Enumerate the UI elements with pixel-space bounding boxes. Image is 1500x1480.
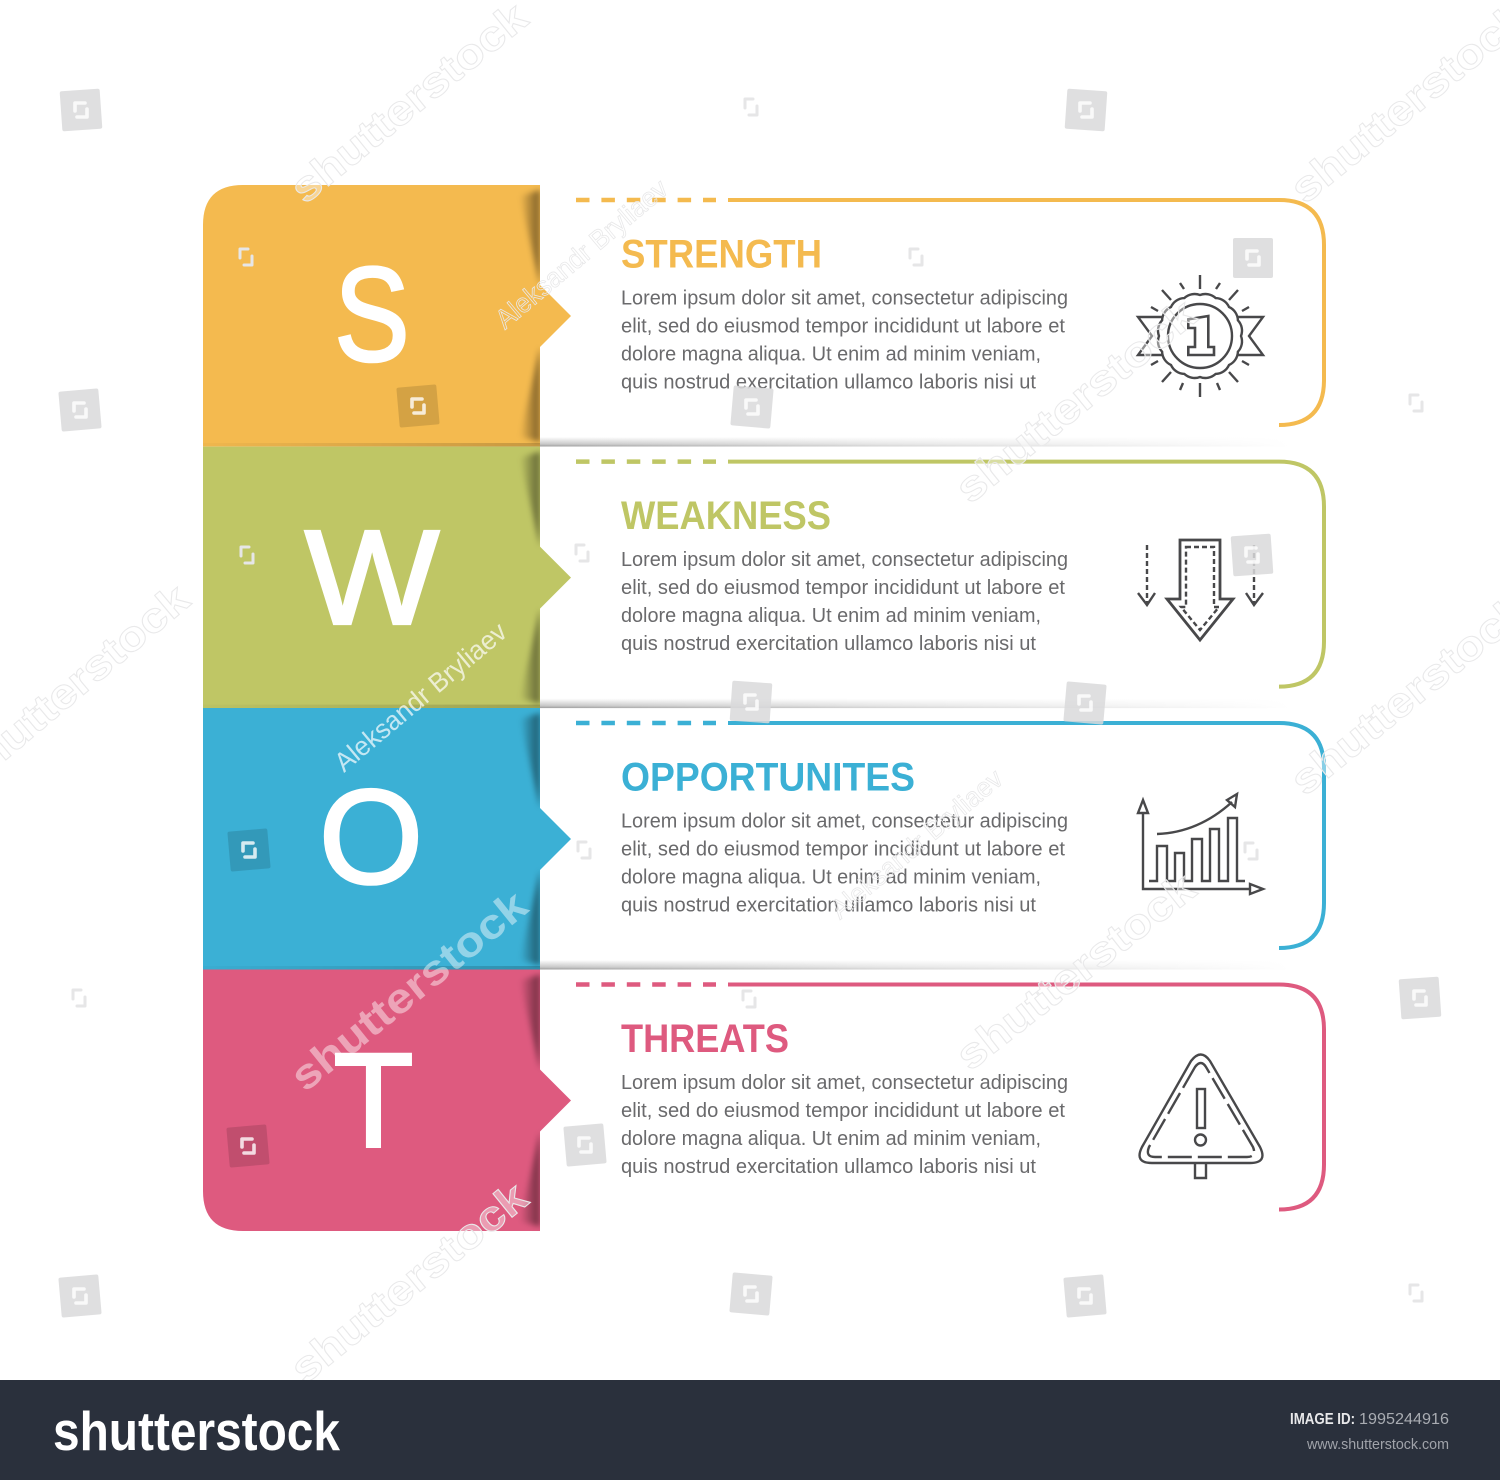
outline: weakness dashes: [576, 459, 716, 464]
icon: down arrows: [1138, 540, 1263, 640]
watermark: diagonal text: shutterstock: [946, 289, 1206, 512]
footer image id number: 1995244916: [1359, 1411, 1449, 1428]
heading: strength: STRENGTH: [621, 232, 822, 276]
text block: opportunities: [621, 810, 1068, 916]
watermark: diagonal text: shutterstock: [281, 1173, 537, 1392]
fold shadow: O block: [203, 713, 540, 970]
row: strength: [203, 185, 1324, 447]
fold shadow: S block: [203, 190, 540, 447]
heading: opportunities: OPPORTUNITES: [621, 756, 915, 800]
footer bar: [0, 1380, 1500, 1480]
row: weakness: [203, 447, 1324, 709]
row: threats: [203, 970, 1324, 1231]
fold shadow: W block: [203, 452, 540, 709]
text block: strength: dolore magna aliqua. Ut enim ad minim veniam,: [621, 344, 1041, 366]
footer logo: shutterstock: [53, 1400, 340, 1462]
text block: weakness: Lorem ipsum dolor sit amet, consectetur adipiscing: [621, 549, 1068, 571]
panel: W colour block: [203, 447, 571, 708]
text block: strength: elit, sed do eiusmod tempor incididunt ut labore et: [621, 316, 1065, 338]
outline: weakness border: [728, 462, 1324, 687]
footer website: www.shutterstock.com: [1306, 1437, 1449, 1453]
panel: S colour block: [203, 185, 571, 446]
letter W: W: [305, 504, 440, 653]
text block: strength: Lorem ipsum dolor sit amet, consectetur adipiscing: [621, 288, 1068, 310]
outline: opportunities dashes: [576, 721, 716, 725]
text block: threats: Lorem ipsum dolor sit amet, consectetur adipiscing: [621, 1072, 1068, 1094]
watermark: diagonal text: shutterstock: [1281, 585, 1500, 804]
text block: strength: quis nostrud exercitation ullamco laboris nisi ut: [621, 372, 1036, 394]
footer image id label: IMAGE ID:: [1290, 1411, 1355, 1428]
heading: weakness: WEAKNESS: [621, 494, 831, 538]
watermark: diagonal text: shutterstock: [947, 863, 1205, 1079]
divider shadow: [540, 698, 1292, 709]
divider shadow: [540, 436, 1292, 447]
text block: threats: elit, sed do eiusmod tempor incididunt ut labore et: [621, 1100, 1065, 1122]
text block: threats: quis nostrud exercitation ullamco laboris nisi ut: [621, 1156, 1036, 1178]
text block: weakness: quis nostrud exercitation ullamco laboris nisi ut: [621, 633, 1036, 655]
text block: weakness: dolore magna aliqua. Ut enim ad minim veniam,: [621, 605, 1041, 627]
icon: growth chart: [1138, 794, 1263, 894]
icon: warning sign: [1140, 1054, 1262, 1178]
text block: threats: dolore magna aliqua. Ut enim ad minim veniam,: [621, 1128, 1041, 1150]
watermark: diagonal text: Aleksandr Bryliaev: [825, 763, 1009, 925]
watermark: diagonal text: shutterstock: [281, 881, 537, 1100]
text block: threats: [621, 1072, 1068, 1178]
text block: strength: [621, 288, 1068, 394]
text block: opportunities: Lorem ipsum dolor sit amet, consectetur adipiscing: [621, 810, 1068, 832]
divider shadow: [540, 959, 1292, 970]
watermark: diagonal text: shutterstock: [281, 0, 537, 212]
text block: opportunities: dolore magna aliqua. Ut enim ad minim veniam,: [621, 866, 1041, 888]
letter O: O: [319, 763, 423, 912]
watermark: diagonal text: shutterstock: [1281, 0, 1500, 212]
letter T: T: [334, 1026, 414, 1176]
outline: strength dashes: [576, 198, 716, 202]
panel: O colour block: [203, 708, 571, 970]
text block: opportunities: elit, sed do eiusmod tempor incididunt ut labore et: [621, 838, 1065, 860]
text block: opportunities: quis nostrud exercitation ullamco laboris nisi ut: [621, 894, 1036, 916]
fold shadow: T block: [520, 974, 540, 1226]
heading: threats: THREATS: [621, 1017, 789, 1061]
watermark: logo squares: [58, 89, 1441, 1318]
row: opportunities: [203, 708, 1324, 970]
text block: weakness: elit, sed do eiusmod tempor incididunt ut labore et: [621, 577, 1065, 599]
watermark: diagonal text: Aleksandr Bryliaev: [329, 616, 513, 778]
letter S: S: [334, 240, 410, 390]
outline: threats dashes: [576, 982, 716, 987]
text block: weakness: [621, 549, 1068, 655]
watermark: diagonal text: Aleksandr Bryliaev: [490, 173, 674, 335]
outline: threats border: [728, 984, 1324, 1210]
outline: strength border: [728, 200, 1324, 425]
outline: opportunities border: [728, 723, 1324, 948]
panel: T colour block: [203, 970, 571, 1231]
icon: medal with number one: [1138, 275, 1263, 397]
